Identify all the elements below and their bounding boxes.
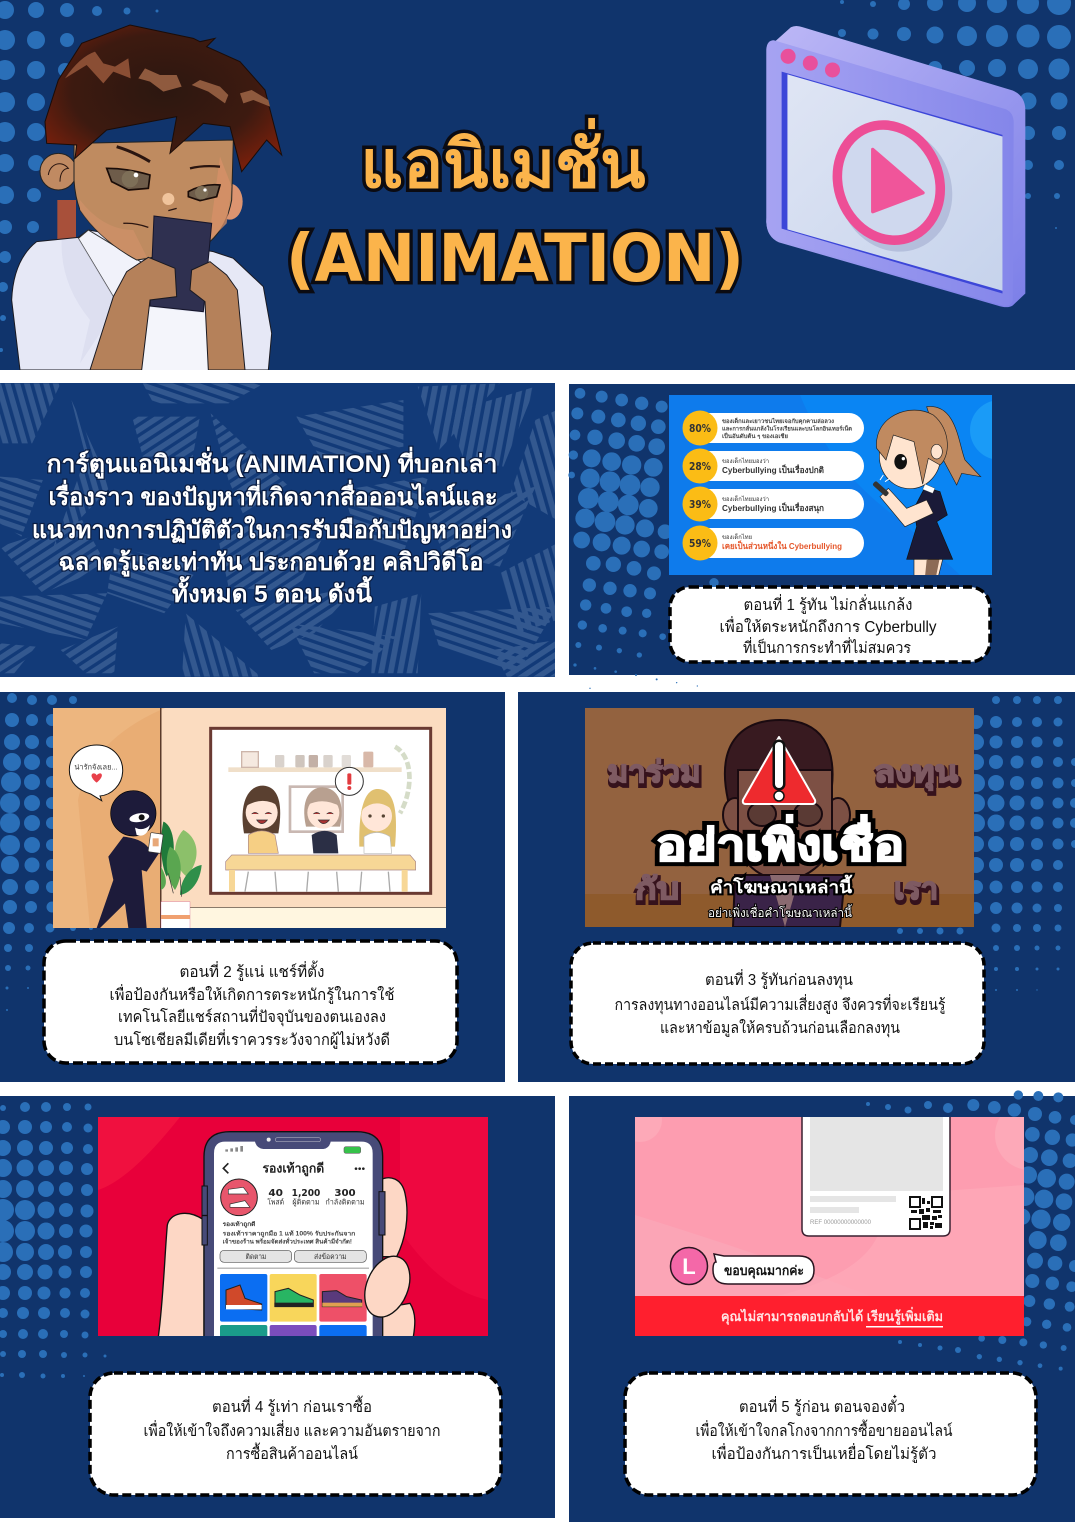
profile header: ส่งข้อความ xyxy=(314,1252,347,1261)
intro text: การ์ตูนแอนิเมชั่น (ANIMATION) ที่บอกเล่า xyxy=(46,446,498,479)
dimmed side words: เรา xyxy=(894,873,938,906)
illustration: boy looking at phone xyxy=(12,25,282,370)
headline: อย่าเพิ่งเชื่อ xyxy=(656,815,904,870)
intro text: เรื่องราว ของปัญหาที่เกิดจากสื่อออนไลน์และ xyxy=(48,479,498,511)
callout: episode 3: และหาข้อมูลให้ครบถ้วนก่อนเลือกลงทุน xyxy=(660,1019,900,1038)
profile header: 1,200 xyxy=(292,1188,320,1199)
callout: episode 1 xyxy=(670,587,990,662)
callout: episode 2: เพื่อป้องกันหรือให้เกิดการตระหนักรู้ในการใช้ xyxy=(110,984,394,1005)
plant and pot xyxy=(161,822,202,928)
icon: video player window xyxy=(766,26,1025,307)
halftone dots right xyxy=(838,0,1071,229)
statistic row 39%: ของเด็กไทยมองว่า xyxy=(722,494,769,503)
callout: episode 3: การลงทุนทางออนไลน์มีความเสี่ยงสูง จึงควรที่จะเรียนรู้ xyxy=(614,994,946,1015)
callout: episode 1: ตอนที่ 1 รู้ทัน ไม่กลั่นแกล้ง xyxy=(744,594,912,615)
chat avatar xyxy=(670,1248,708,1284)
statistic row 80%: ของเด็กและเยาวชนไทยเจอกับคุกคามล่อลวง xyxy=(722,417,834,425)
statistic row 28% xyxy=(682,448,864,484)
statistic row 28%: ของเด็กไทยมองว่า xyxy=(722,456,769,465)
video still: fake ticket chat xyxy=(618,1098,1065,1336)
callout: episode 5: ตอนที่ 5 รู้ก่อน ตอนจองตั๋ว xyxy=(739,1394,905,1417)
statistic row 28%: 28% xyxy=(689,460,711,473)
callout: episode 2: บนโซเชียลมีเดียที่เราควรระวังจากผู้ไม่หวังดี xyxy=(114,1029,390,1050)
dimmed side words: ลงทุน xyxy=(874,756,959,791)
product tiles xyxy=(220,1274,367,1338)
callout: episode 1: ที่เป็นการกระทำที่ไม่สมควร xyxy=(743,637,911,657)
profile header xyxy=(217,1161,369,1269)
profile header: 300 xyxy=(334,1188,356,1199)
video still: fake shoe shop on phone xyxy=(98,1117,488,1338)
statistic row 39% xyxy=(682,486,864,522)
statistic row 39%: Cyberbullying เป็นเรื่องสนุก xyxy=(722,501,824,514)
warning triangle xyxy=(743,737,815,804)
profile header: โพสต์ xyxy=(267,1197,284,1206)
thumb xyxy=(364,1256,411,1318)
ticket card: REF 00000000000000 xyxy=(810,1219,871,1226)
callout: episode 4: เพื่อให้เข้าใจถึงความเสี่ยง และความอันตรายจาก xyxy=(144,1420,440,1440)
headline xyxy=(656,815,904,920)
ticket card xyxy=(802,1115,950,1236)
dimmed side words: กับ xyxy=(636,876,680,909)
shop window xyxy=(211,728,431,893)
callout: episode 1: เพื่อให้ตระหนักถึงการ Cyberbully xyxy=(720,616,937,636)
QR code xyxy=(910,1197,942,1229)
statistic row 39%: 39% xyxy=(689,498,711,511)
statistic row 80%: เป็นอันดับต้น ๆ ของเอเชีย xyxy=(722,432,788,440)
halftone dots xyxy=(0,693,93,1011)
callout: episode 2: เทคโนโลยีแชร์สถานที่ปัจจุบันของตนเองลง xyxy=(118,1006,386,1027)
profile header: ผู้ติดตาม xyxy=(292,1197,320,1206)
halftone dots left xyxy=(0,1,158,352)
headline: คำโฆษณาเหล่านี้ xyxy=(710,874,852,897)
panel: episode 2 xyxy=(0,692,505,1082)
title: (ANIMATION) xyxy=(286,220,744,297)
statistic row 80%: 80% xyxy=(689,422,711,435)
panel: episode 1 xyxy=(568,384,1075,689)
intro text: ฉลาดรู้และเท่าทัน ประกอบด้วย คลิปวิดีโอ xyxy=(58,547,484,577)
dimmed side words: ลงทุน xyxy=(875,759,960,794)
video still: investment scam warning xyxy=(585,708,974,927)
panel: introduction xyxy=(0,383,557,677)
callout: episode 2 xyxy=(44,941,457,1063)
panel: episode 5 xyxy=(569,1090,1075,1522)
three students xyxy=(243,767,396,853)
phone xyxy=(202,1132,385,1337)
statistic row 28%: Cyberbullying เป็นเรื่องปกติ xyxy=(722,463,824,475)
panel: header xyxy=(0,0,1075,370)
callout: episode 2: ตอนที่ 2 รู้แน่ แชร์ที่ตั้ง xyxy=(180,960,324,982)
dimmed side words: มาร่วม xyxy=(608,756,700,789)
illustration: girl with phone xyxy=(872,406,981,577)
statistic row 80% xyxy=(682,410,864,446)
stranger silhouette xyxy=(97,791,163,928)
intro text: ทั้งหมด 5 ตอน ดังนี้ xyxy=(172,575,373,608)
hand behind phone xyxy=(158,1178,415,1337)
striped pattern background xyxy=(0,383,557,677)
headline: อย่าเพิ่งเชื่อคำโฆษณาเหล่านี้ xyxy=(708,904,853,920)
profile header: 40 xyxy=(268,1188,283,1199)
panel: episode 3 xyxy=(518,692,1075,1082)
callout: episode 5 xyxy=(625,1373,1036,1495)
halftone dots xyxy=(0,1102,106,1378)
video still: cyberbully statistics xyxy=(669,395,992,575)
hair xyxy=(45,25,282,172)
profile header: รองเท้าราคาถูกมือ 1 แท้ 100% รับประกันจาก xyxy=(223,1229,356,1238)
speech bubble xyxy=(69,745,123,801)
callout: episode 3: ตอนที่ 3 รู้ทันก่อนลงทุน xyxy=(705,969,853,990)
panel: episode 4 xyxy=(0,1096,555,1518)
halftone dots xyxy=(866,1090,1075,1371)
profile header: กำลังติดตาม xyxy=(325,1197,365,1206)
statistic row 80%: และการกลั่นแกล้งในโรงเรียนและบนโลกอินเทอร์เน็ต xyxy=(722,424,852,432)
intro text: แนวทางการปฏิบัติตัวในการรับมือกับปัญหาอย่าง xyxy=(32,515,512,544)
statistic row 59% xyxy=(682,526,864,560)
chat bubble xyxy=(713,1254,814,1284)
intro text xyxy=(32,446,512,608)
title xyxy=(286,117,744,297)
callout: episode 4: ตอนที่ 4 รู้เท่า ก่อนเราซื้อ xyxy=(212,1395,372,1417)
statistic row 59%: 59% xyxy=(689,537,711,550)
chat avatar: L xyxy=(682,1254,696,1279)
title: แอนิเมชั่น xyxy=(360,117,646,201)
callout: episode 3 xyxy=(571,943,984,1064)
reply notice bar xyxy=(635,1296,1024,1336)
reply notice bar: คุณไม่สามารถตอบกลับได้ เรียนรู้เพิ่มเติม xyxy=(721,1306,943,1325)
profile header: รองเท้าถูกดี xyxy=(223,1220,256,1229)
video still: stranger photographing through window xyxy=(53,708,446,928)
table xyxy=(226,855,416,892)
halftone dots xyxy=(897,696,1075,991)
statistic row 59%: ของเด็กไทย xyxy=(722,532,752,541)
profile header: รองเท้าถูกดี xyxy=(262,1161,324,1176)
dimmed side words: กับ xyxy=(635,873,679,906)
callout: episode 5: เพื่อป้องกันการเป็นเหยื่อโดยไม่รู้ตัว xyxy=(712,1443,936,1464)
dimmed man in suit xyxy=(723,720,850,927)
profile header: เจ้าของร้าน พร้อมจัดส่งทั่วประเทศ สินค้ามีจำกัด! xyxy=(223,1236,352,1245)
callout: episode 4: การซื้อสินค้าออนไลน์ xyxy=(226,1442,358,1463)
dimmed side words xyxy=(608,756,960,909)
chat bubble: ขอบคุณมากค่ะ xyxy=(724,1263,804,1279)
halftone dots xyxy=(568,388,719,689)
speech bubble: น่ารักจังเลย... xyxy=(74,762,118,771)
profile header: ติดตาม xyxy=(245,1252,266,1261)
phone xyxy=(150,216,212,312)
headline: อย่าเพิ่งเชื่อ xyxy=(656,815,904,870)
dimmed side words: เรา xyxy=(895,876,939,909)
callout: episode 5: เพื่อให้เข้าใจกลโกงจากการซื้อขายออนไลน์ xyxy=(696,1419,953,1440)
statistic row 59%: เคยเป็นส่วนหนึ่งใน Cyberbullying xyxy=(722,539,842,551)
callout: episode 4 xyxy=(90,1373,501,1495)
dimmed side words: มาร่วม xyxy=(608,759,702,792)
